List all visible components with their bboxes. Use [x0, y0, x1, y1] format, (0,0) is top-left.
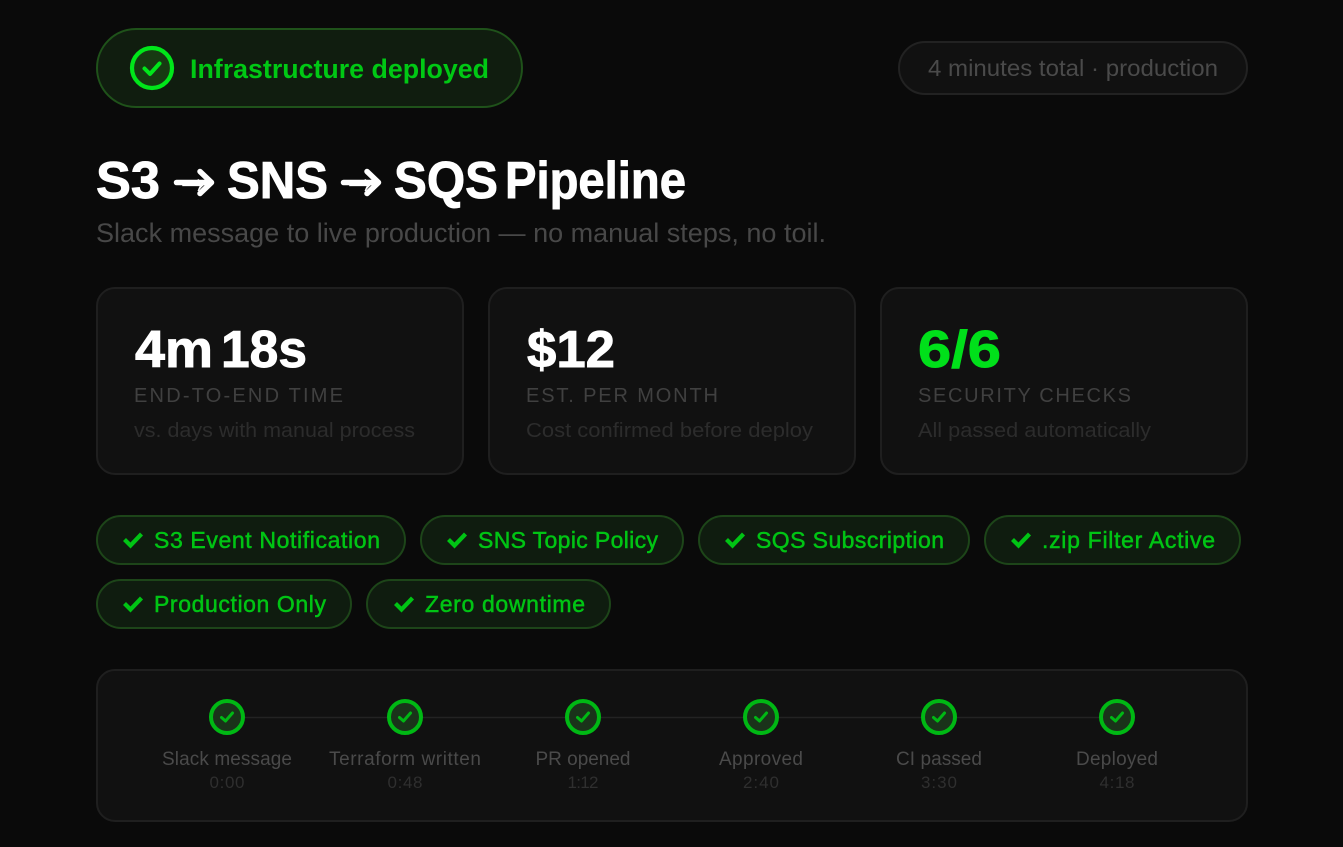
step: Terraform written: 0:48	[388, 773, 422, 792]
stat card: security checks	[881, 288, 1247, 474]
chip: SNS Topic Policy: SNS Topic Policy	[478, 527, 658, 553]
step: CI passed: CI passed	[896, 749, 982, 770]
chip: SQS Subscription: SQS Subscription	[756, 527, 944, 553]
step: Terraform written	[329, 701, 481, 792]
step: Deployed	[1076, 701, 1158, 792]
stat card: cost per month	[489, 288, 855, 474]
stat card: cost per month: Cost confirmed before deploy	[526, 420, 813, 442]
step: Terraform written: Terraform written	[329, 749, 481, 770]
chip: .zip Filter Active	[985, 516, 1240, 564]
stat card: end-to-end time: vs. days with manual process	[134, 420, 415, 442]
step: Slack message	[162, 701, 292, 792]
stat card: security checks: SECURITY CHECKS	[918, 385, 1131, 407]
stat card: end-to-end time: END-TO-END TIME	[134, 385, 343, 407]
status text: Infrastructure deployed	[190, 54, 489, 84]
step: Deployed: 4:18	[1100, 773, 1134, 792]
step: Slack message: Slack message	[162, 749, 292, 770]
step: PR opened: PR opened	[536, 749, 630, 770]
icon: status check circle	[132, 48, 172, 88]
step: PR opened	[536, 701, 630, 792]
title: S3	[96, 152, 160, 210]
status badge: infrastructure deployed	[97, 29, 522, 107]
chip: S3 Event Notification	[97, 516, 405, 564]
chip: S3 Event Notification: S3 Event Notification	[154, 527, 380, 553]
chip: SNS Topic Policy	[421, 516, 683, 564]
step: Approved: 2:40	[743, 773, 779, 792]
title: →	[342, 148, 378, 204]
stat card: end-to-end time	[97, 288, 463, 474]
title: SQS	[394, 152, 498, 210]
stat card: security checks: All passed automatically	[918, 420, 1151, 442]
title: Pipeline	[505, 152, 686, 210]
stat card: security checks: 6/6	[918, 321, 1001, 379]
step: PR opened: 1:12	[568, 773, 598, 792]
stat card: end-to-end time: 18s	[221, 321, 307, 379]
step: Approved: Approved	[719, 749, 803, 770]
chip: .zip Filter Active: .zip Filter Active	[1042, 527, 1215, 553]
title: →	[175, 148, 211, 204]
step: Slack message: 0:00	[210, 773, 244, 792]
stat card: cost per month: $12	[527, 321, 615, 379]
chip: Zero downtime	[367, 580, 610, 628]
panel: deployment timeline	[97, 670, 1247, 821]
duration badge	[899, 42, 1247, 94]
stat card: cost per month: EST. PER MONTH	[526, 385, 718, 407]
step: CI passed: 3:30	[921, 773, 957, 792]
chip: Production Only	[97, 580, 351, 628]
subtitle: Slack message to live production — no manual steps, no toil.	[96, 218, 826, 248]
title: SNS	[227, 152, 328, 210]
chip: SQS Subscription	[699, 516, 969, 564]
chip: Zero downtime: Zero downtime	[425, 591, 585, 617]
duration badge: 4 minutes total · production	[928, 55, 1218, 81]
step: Approved	[719, 701, 803, 792]
stat card: end-to-end time: 4m	[135, 321, 213, 379]
step: CI passed	[896, 701, 982, 792]
step: Deployed: Deployed	[1076, 749, 1158, 770]
chip: Production Only: Production Only	[154, 591, 326, 617]
title	[96, 148, 686, 210]
